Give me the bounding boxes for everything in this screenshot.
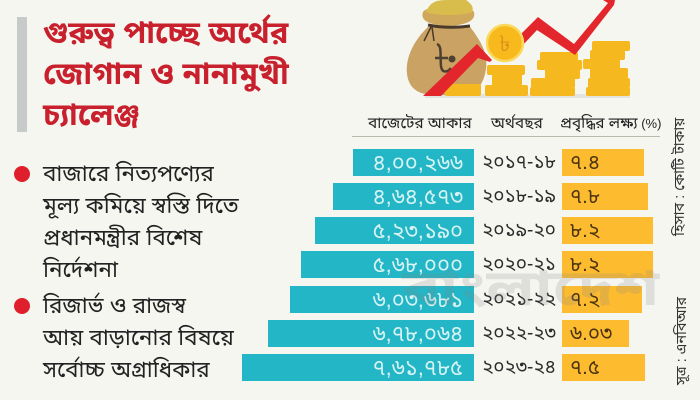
chart row 2021-22: ৬,০৩,৬৮১ <box>373 287 463 312</box>
icon: taka coin <box>487 25 523 61</box>
heading rule <box>352 136 660 137</box>
icon: money bag <box>407 0 486 95</box>
icon: rising red arrow <box>423 0 615 96</box>
chart row 2021-22: ২০২১-২২ <box>482 289 556 310</box>
title: জোগান ও নানামুখী <box>43 56 289 91</box>
bullet 2 text <box>42 292 234 382</box>
icon: coin stacks <box>445 41 630 96</box>
bullet 1 text: মূল্য কমিয়ে স্বস্তি দিতে <box>43 193 239 218</box>
chart row 2018-19: ৪,৬৪,৫৭৩ <box>373 184 463 209</box>
chart row 2023-24: ৭,৬১,৭৮৫ <box>373 355 463 380</box>
column heading: budget size: বাজেটের আকার <box>368 115 472 132</box>
chart row 2019-20 <box>315 217 653 244</box>
chart row 2017-18: ৪,০০,২৬৬ <box>373 150 463 175</box>
chart row 2017-18: ৭.৪ <box>570 151 600 174</box>
title <box>42 14 290 132</box>
title: চ্যালেঞ্জ <box>43 97 140 132</box>
column heading: growth target: প্রবৃদ্ধির লক্ষ্য (%) <box>560 115 661 132</box>
unit note: হিসাব : কোটি টাকায় <box>672 118 688 236</box>
chart row 2021-22 <box>290 286 642 313</box>
chart row 2022-23: ২০২২-২৩ <box>482 323 556 344</box>
chart row 2018-19: ৭.৮ <box>570 185 600 208</box>
chart row 2021-22: ৭.২ <box>570 288 600 311</box>
chart row 2023-24: ২০২৩-২৪ <box>482 357 556 378</box>
title accent bar <box>17 17 27 132</box>
chart row 2019-20: ৮.২ <box>570 219 600 242</box>
chart row 2018-19 <box>333 183 648 210</box>
chart row 2019-20: ৫,২৩,১৯০ <box>373 218 463 243</box>
bullet 1 text <box>42 160 239 282</box>
ground shadow <box>425 94 630 98</box>
chart row 2020-21: ৫,৬৮,০০০ <box>373 252 463 277</box>
bullet 2 text: রিজার্ভ ও রাজস্ব <box>43 293 186 318</box>
title: গুরুত্ব পাচ্ছে অর্থের <box>43 15 288 50</box>
chart row 2022-23 <box>268 320 629 347</box>
bullet 1 marker <box>14 166 30 182</box>
bullet 2 text: আয় বাড়ানোর বিষয়ে <box>43 325 234 350</box>
chart row 2017-18 <box>353 149 644 176</box>
chart row 2018-19: ২০১৮-১৯ <box>482 186 556 207</box>
bullet 1 text: বাজারে নিত্যপণ্যের <box>43 161 214 186</box>
chart row 2017-18: ২০১৭-১৮ <box>482 152 556 173</box>
illustration: money bag, coins and rising arrow <box>406 0 630 98</box>
watermark: বাংলাদেশ <box>402 260 659 316</box>
chart row 2023-24: ৭.৫ <box>570 356 600 379</box>
bullet 2 text: সর্বোচ্চ অগ্রাধিকার <box>43 357 210 382</box>
chart row 2020-21 <box>301 251 653 278</box>
chart row 2023-24 <box>242 354 645 381</box>
bullet 2 marker <box>14 298 30 314</box>
chart row 2022-23: ৬,৭৮,০৬৪ <box>373 321 463 346</box>
chart row 2019-20: ২০১৯-২০ <box>482 220 556 241</box>
source note: সূত্র : এনবিআর <box>674 297 690 385</box>
column heading: fiscal year: অর্থবছর <box>491 115 543 132</box>
icon: taka coin: ৳ <box>500 31 510 56</box>
chart row 2020-21: ৮.২ <box>570 253 600 276</box>
chart row 2020-21: ২০২০-২১ <box>482 254 556 275</box>
chart row 2022-23: ৬.০৩ <box>570 322 612 345</box>
bullet 1 text: নির্দেশনা <box>43 257 118 282</box>
bullet 1 text: প্রধানমন্ত্রীর বিশেষ <box>43 225 202 250</box>
